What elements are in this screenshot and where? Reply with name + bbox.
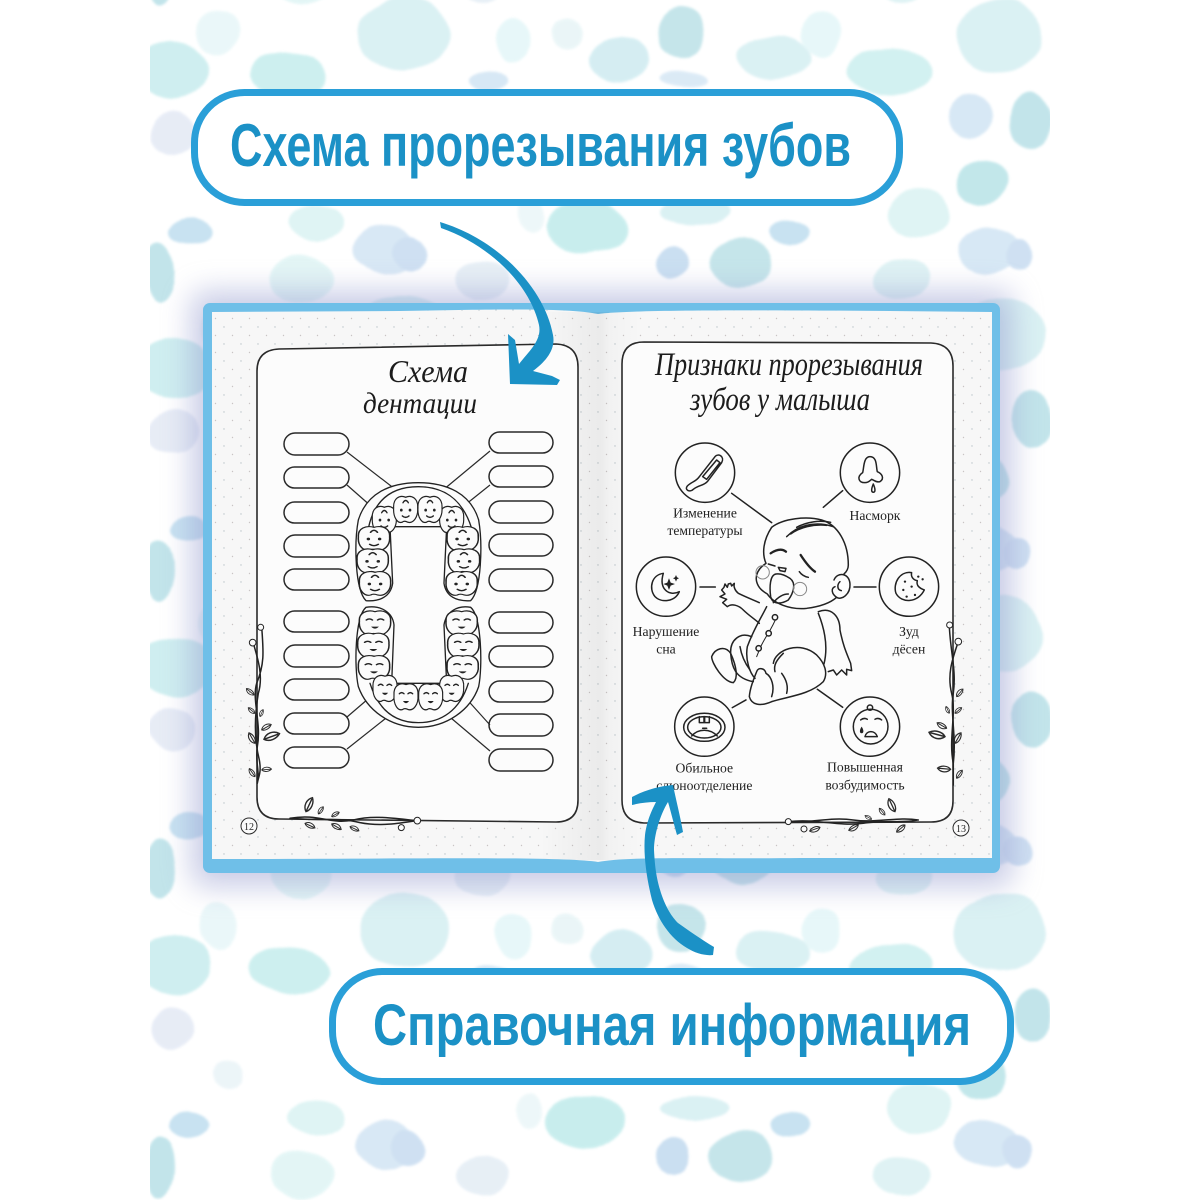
page number 13: 13 [956,824,966,835]
blank label pills left [284,433,349,768]
baby illustration [712,518,852,704]
left page panel: dentition chart [241,344,578,834]
icon: crying baby [840,697,900,756]
icon: open mouth [675,697,734,756]
watercolor background [136,0,1052,1198]
panel title: зубов у малыша [689,382,870,418]
label: excitability: возбудимость [825,777,905,792]
tooth diagram [356,483,481,727]
blank label pills right [489,432,553,771]
book cover [203,303,1000,873]
page number 12: 12 [244,822,254,833]
arrow: from top heading to dentition chart [440,222,560,385]
book shadow [192,292,1012,886]
heading pill: top [194,92,900,202]
panel title: дентации [363,387,477,420]
panel frame [257,344,578,822]
panel title: Признаки прорезывания [654,347,923,383]
page number 12 [241,818,257,834]
panel frame [622,342,953,823]
label: excitability [825,760,905,792]
panel title [363,353,477,420]
label: temperature [667,505,743,538]
right page panel: teething signs [622,342,969,836]
label: sleep: сна [656,641,676,656]
icon: nose [840,443,900,502]
bottom vine ornament right page [785,797,918,834]
left vine ornament [245,624,281,783]
book pages [212,309,992,862]
panel title: Схема [388,353,468,389]
label: sleep [633,624,699,656]
bottom vine ornament left page [290,796,421,833]
page number 13 [953,820,969,836]
label: temperature: Изменение [673,505,737,520]
spine shading [540,312,640,860]
icon: moon and stars [636,557,696,616]
arrow: from bottom heading to teething signs [632,785,714,955]
right vine ornament [928,622,964,785]
icon: thermometer [675,443,735,502]
label: excitability: Повышенная [827,760,904,775]
label: itching gums: Зуд [899,624,919,639]
label: drooling [656,760,752,793]
connector lines [700,491,876,708]
label: drooling: Обильное [676,760,733,775]
open book [192,292,1012,886]
label: sleep: Нарушение [633,624,699,639]
heading pill: top: Схема прорезывания зубов [230,112,851,179]
heading pill: bottom [332,972,1010,1082]
label: temperature: температуры [667,523,743,538]
label: itching gums: дёсен [893,641,925,656]
connector lines [347,451,490,751]
label: drooling: слюноотделение [656,778,752,793]
panel title [654,347,923,418]
icon: cookie [879,557,939,616]
label: itching gums [893,624,925,656]
label: runny nose: Насморк [850,508,901,523]
heading pill: bottom: Справочная информация [373,993,971,1058]
